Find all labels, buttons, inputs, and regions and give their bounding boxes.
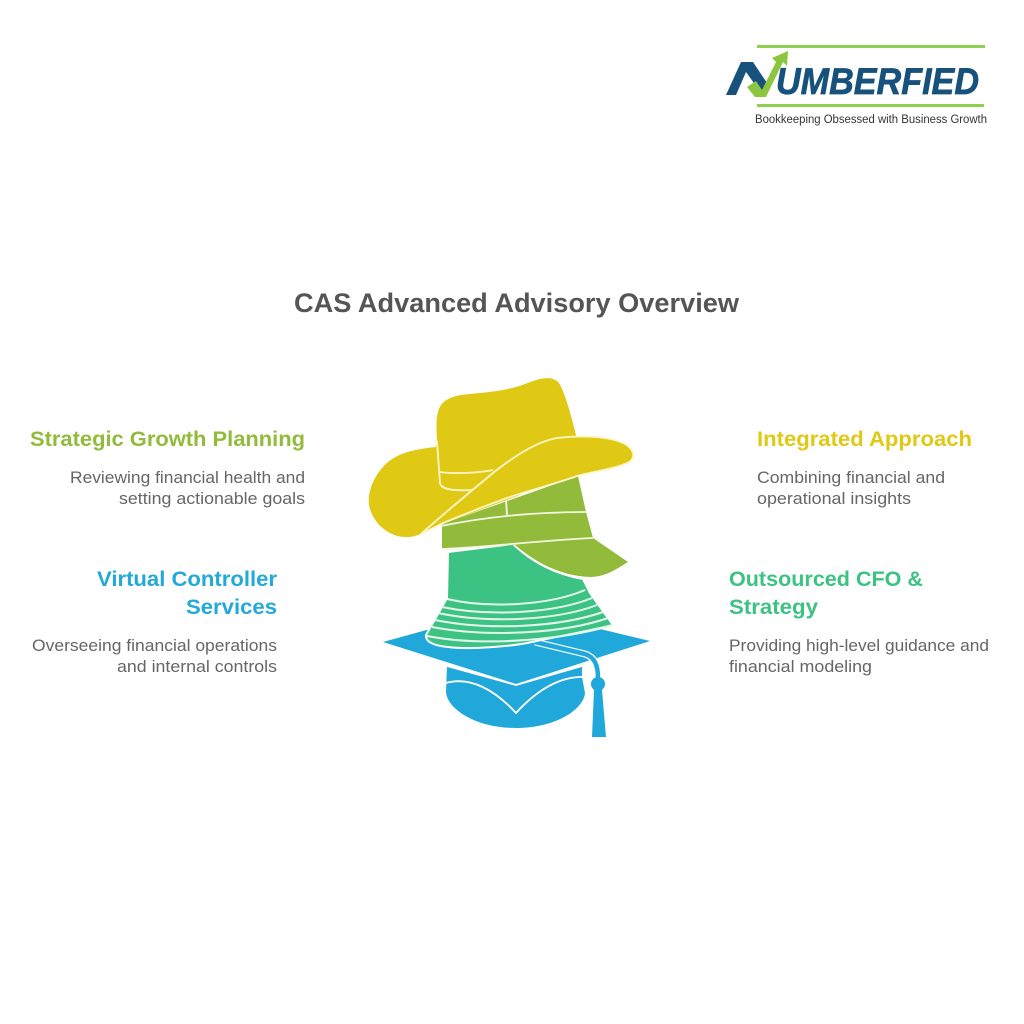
text block: Virtual Controller Services: Services [186,596,277,619]
text block: Virtual Controller Services: and internal controls [117,657,277,676]
icon: logo N mark with arrow [726,51,788,97]
icon: tassel [535,642,606,737]
icon: cowboy hat [369,378,633,537]
text block: Strategic Growth Planning: Strategic Growth Planning [30,428,305,451]
text block: Virtual Controller Services [32,568,277,676]
icon: graduation cap [383,629,650,737]
text block: Outsourced CFO & Strategy: Outsourced CFO & [729,568,923,591]
text block: Strategic Growth Planning [30,428,305,508]
logo wordmark: UMBERFIED [776,61,979,102]
text block: Integrated Approach: operational insights [757,489,911,508]
icon: bucket hat [426,544,613,648]
text block: Outsourced CFO & Strategy: Strategy [729,596,818,619]
text block: Integrated Approach [757,428,972,508]
logo: Numberfied [726,45,987,126]
text block: Strategic Growth Planning: setting actionable goals [119,489,305,508]
text block: Integrated Approach: Integrated Approach [757,428,972,451]
text block: Virtual Controller Services: Virtual Controller [97,568,277,591]
logo tagline: Bookkeeping Obsessed with Business Growth [755,114,987,126]
illustration: stacked hats [369,378,650,737]
title: CAS Advanced Advisory Overview [294,288,740,318]
text block: Virtual Controller Services: Overseeing financial operations [32,636,277,655]
text block: Outsourced CFO & Strategy: Providing high-level guidance and [729,636,989,655]
icon: baseball cap [441,476,628,577]
text block: Strategic Growth Planning: Reviewing financial health and [70,468,305,487]
text block: Outsourced CFO & Strategy [729,568,989,676]
text block: Outsourced CFO & Strategy: financial modeling [729,657,872,676]
text block: Integrated Approach: Combining financial and [757,468,945,487]
